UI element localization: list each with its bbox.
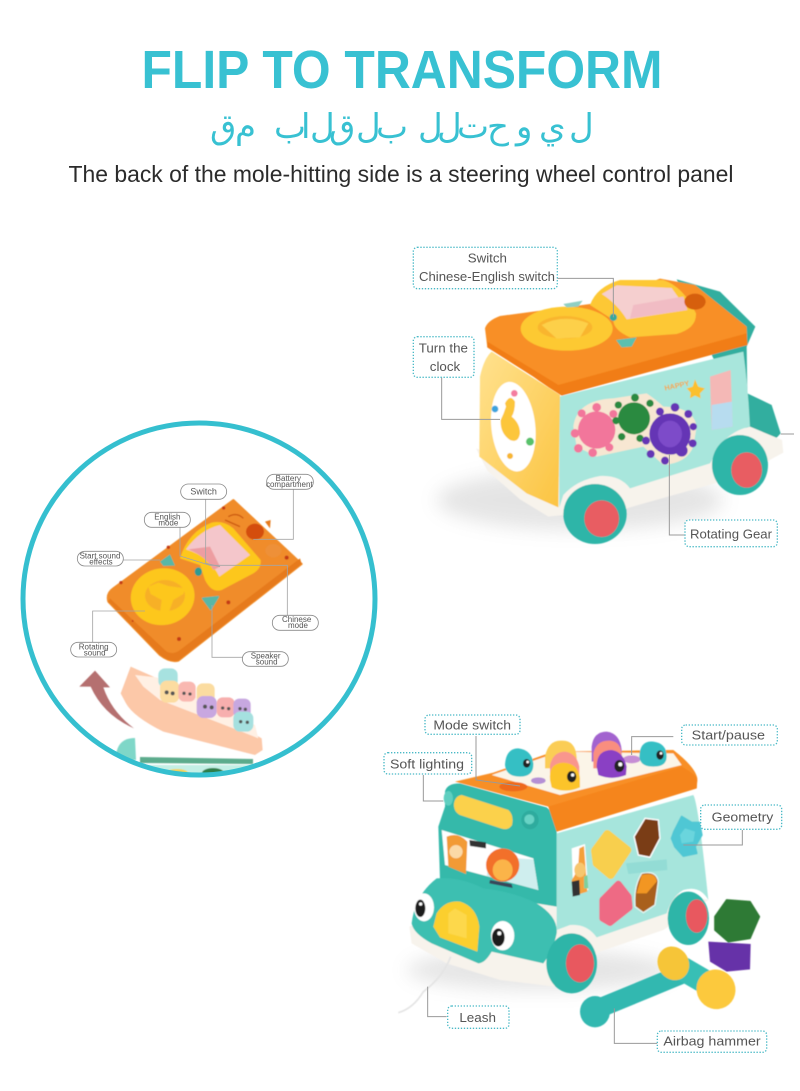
label: turn the clock: clock — [430, 359, 461, 374]
panel: toy bus, steering wheel side — [413, 247, 794, 547]
label: turn the clock — [413, 337, 474, 377]
label: rotating sound: sound — [84, 648, 106, 657]
stacked shapes — [708, 942, 751, 972]
shape sorter holes — [634, 818, 660, 857]
front upper body — [438, 783, 557, 907]
side body — [557, 795, 708, 937]
windshield sticker — [442, 830, 538, 890]
label: turn the clock: Turn the — [419, 340, 468, 355]
label: switch — [181, 484, 227, 499]
label: start sound effects — [77, 551, 123, 567]
subheading: The back of the mole-hitting side is a steering wheel control panel — [68, 161, 734, 187]
bus — [398, 732, 759, 1027]
label: english mode: English — [154, 513, 180, 522]
label: chinese mode — [272, 615, 318, 630]
gear: pink — [571, 403, 617, 457]
label: rotating sound — [71, 642, 117, 657]
screen — [590, 280, 696, 337]
mole eyes — [523, 750, 664, 782]
orange control panel — [108, 500, 302, 755]
tiger sticker — [447, 835, 467, 874]
sticker — [710, 370, 733, 430]
label: speaker sound: Speaker — [251, 651, 281, 660]
label: rotating gear: Rotating Gear — [690, 527, 773, 542]
buttons — [160, 554, 175, 566]
label: chinese mode: Chinese — [282, 615, 312, 624]
label: switch: Switch — [190, 486, 217, 496]
panel: toy bus, mole-hitting side — [384, 715, 782, 1052]
label: start sound effects: Start sound — [80, 551, 120, 560]
left eye — [414, 893, 434, 921]
label: geometry — [701, 805, 782, 829]
label: speaker sound: sound — [256, 657, 278, 666]
label: english mode: mode — [158, 519, 179, 528]
ground shadow — [437, 470, 723, 530]
leash — [398, 957, 451, 1013]
rear wheel — [712, 435, 768, 495]
shapes — [595, 834, 627, 875]
label: battery compartment — [266, 474, 313, 489]
label: airbag hammer — [657, 1031, 767, 1052]
rear yellow — [479, 352, 560, 507]
flipped mole board — [121, 667, 263, 755]
label: rotating gear — [685, 520, 777, 547]
clock — [487, 380, 540, 474]
front wheel — [546, 933, 597, 993]
label: airbag hammer: Airbag hammer — [663, 1033, 761, 1048]
rear wheel — [668, 892, 709, 945]
title: FLIP TO TRANSFORM — [142, 40, 662, 100]
head lamp strip — [454, 795, 513, 829]
label: start sound effects: effects — [89, 558, 113, 567]
roof — [485, 279, 747, 396]
moles — [505, 732, 667, 791]
label: soft lighting — [384, 753, 472, 774]
label: battery compartment: Battery — [276, 474, 301, 483]
inset bottom bus clipped — [116, 737, 254, 772]
orange top — [455, 750, 697, 832]
label: english mode — [144, 512, 190, 528]
ground shadow — [407, 950, 673, 990]
label: mode switch — [425, 715, 520, 734]
bus body: HAPPY — [664, 379, 690, 393]
label: start/pause: Start/pause — [692, 727, 765, 742]
screen — [180, 522, 261, 591]
gear: green — [612, 394, 654, 442]
label: geometry: Geometry — [712, 810, 774, 825]
label: soft lighting: Soft lighting — [390, 756, 464, 771]
yellow grille — [433, 901, 479, 952]
label: start/pause — [682, 725, 777, 745]
steering wheel — [126, 563, 199, 630]
leader lines — [442, 278, 794, 535]
hammer — [595, 975, 680, 1010]
side panel — [559, 352, 750, 507]
steering wheel — [521, 307, 613, 351]
circle ring — [23, 423, 375, 775]
side window — [572, 844, 588, 897]
leader lines — [93, 489, 293, 657]
label: switch: Chinese-English switch — [419, 269, 555, 284]
buttons — [616, 337, 637, 347]
label: battery compartment: compartment — [266, 480, 313, 489]
front wheel — [563, 484, 627, 544]
bus body — [476, 279, 783, 544]
gear: purple — [642, 403, 697, 465]
label: chinese mode: mode — [288, 621, 309, 630]
right eye — [491, 921, 514, 950]
hood — [412, 878, 557, 963]
flip arrow — [79, 671, 134, 728]
lion sticker — [486, 848, 519, 882]
white skirt — [476, 427, 783, 517]
label: mode switch: Mode switch — [433, 717, 511, 732]
label: speaker sound — [242, 651, 288, 666]
white bumper — [409, 867, 708, 987]
moles — [158, 668, 178, 688]
label: rotating sound: Rotating — [79, 642, 109, 651]
label: leash: Leash — [459, 1010, 496, 1025]
panel: circle inset with control panel — [23, 423, 375, 778]
label: switch — [413, 247, 557, 289]
label: switch: Switch — [468, 250, 507, 265]
label: leash — [448, 1006, 509, 1028]
arabic subtitle: قم بالقلب للتحويل — [210, 107, 594, 147]
leader lines — [423, 736, 742, 1043]
